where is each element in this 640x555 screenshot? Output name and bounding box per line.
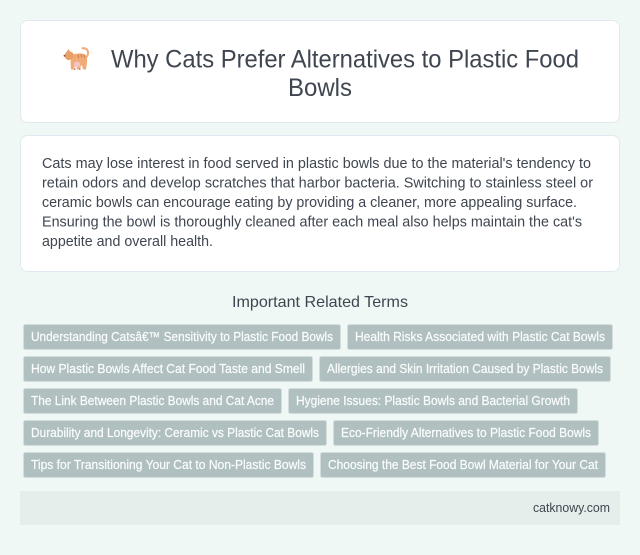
- text block: description: retain odors and develop scratches that harbor bacteria. Switching to stainless steel or: [42, 176, 593, 192]
- text block: description: Ensuring the bowl is thoroughly cleaned after each meal also helps maintain the cat's: [42, 214, 582, 230]
- tag 4: [320, 356, 610, 382]
- tag 3: How Plastic Bowls Affect Cat Food Taste and Smell: [31, 362, 305, 376]
- text block: description: appetite and overall health.: [42, 234, 213, 250]
- tag 8: [334, 420, 598, 446]
- tag 6: Hygiene Issues: Plastic Bowls and Bacterial Growth: [296, 394, 570, 408]
- title: Bowls: [288, 74, 352, 102]
- panel: description: [20, 136, 620, 272]
- tag 9: Tips for Transitioning Your Cat to Non-Plastic Bowls: [31, 458, 306, 472]
- tag 5: [24, 388, 282, 414]
- text block: description: Cats may lose interest in food served in plastic bowls due to the material's tendency to: [42, 156, 591, 172]
- tag 7: [24, 420, 326, 446]
- tag 6: [288, 388, 578, 414]
- title: Why Cats Prefer Alternatives to Plastic Food: [111, 46, 579, 74]
- title: [111, 46, 579, 102]
- tag list: [24, 324, 612, 478]
- tag 1: Understanding Catsâ€™ Sensitivity to Plastic Food Bowls: [31, 330, 333, 344]
- tag 9: [24, 452, 314, 478]
- tag 7: Durability and Longevity: Ceramic vs Plastic Cat Bowls: [31, 426, 319, 440]
- footer source: catknowy.com: [533, 500, 610, 515]
- tag 4: Allergies and Skin Irritation Caused by Plastic Bowls: [327, 362, 603, 376]
- tag 5: The Link Between Plastic Bowls and Cat Acne: [31, 394, 274, 408]
- tag 8: Eco-Friendly Alternatives to Plastic Food Bowls: [341, 426, 591, 440]
- tag 2: [348, 324, 612, 350]
- tag 3: [24, 356, 312, 382]
- panel: title card: [20, 20, 620, 122]
- tag 10: Choosing the Best Food Bowl Material for Your Cat: [328, 458, 598, 472]
- text block: description: ceramic bowls can encourage eating by providing a cleaner, more appealing surface.: [42, 195, 577, 211]
- text block: description: [42, 156, 593, 250]
- icon: cat: [64, 48, 88, 70]
- tag 1: [24, 324, 340, 350]
- heading: related terms: Important Related Terms: [232, 294, 408, 311]
- footer: [20, 491, 620, 525]
- tag 10: [320, 452, 606, 478]
- tag 2: Health Risks Associated with Plastic Cat Bowls: [355, 330, 605, 344]
